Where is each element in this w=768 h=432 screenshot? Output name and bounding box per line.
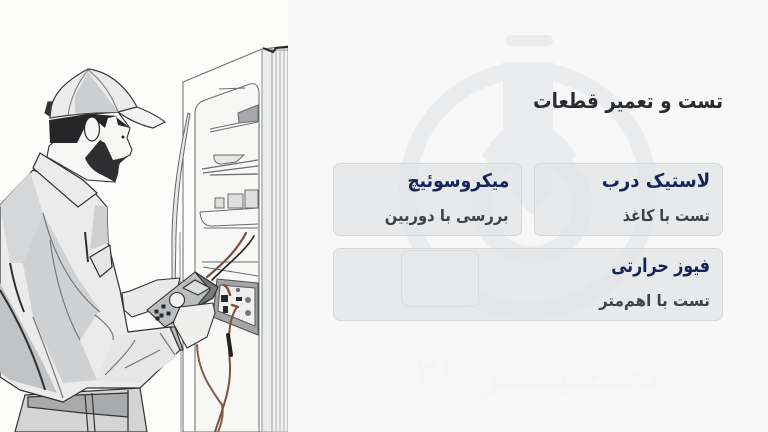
card heading: فیوز حرارتی [611,255,710,277]
card text: تست با کاغذ [623,206,710,225]
control panel [213,279,258,335]
title: تست و تعمیر قطعات [533,89,723,113]
illustration: technician testing refrigerator with multimeter [0,46,288,432]
shelves [210,88,258,132]
card text: بررسی با دوربین [385,206,509,225]
card heading: لاستیک درب [602,170,710,192]
shelf items [238,105,258,123]
watermark text: تعـمـیــــر ۲۴ [414,345,660,400]
cap [45,69,165,128]
refrigerator [172,46,288,432]
watermark: logo and brand [402,35,660,400]
card heading: میکروسوئیچ [407,170,509,192]
card: microswitch [333,163,522,236]
card text: تست با اهم‌متر [599,291,710,310]
pants [15,388,147,432]
card: thermal fuse [333,248,723,321]
shirt and sleeve [0,170,183,402]
faint inset square [401,250,479,307]
neck and face [47,112,132,182]
multimeter and gloves [122,272,218,348]
card: door gasket [534,163,723,236]
collar [33,153,97,207]
beard [85,140,127,182]
hair [49,114,118,143]
test wires [197,233,254,432]
ear [84,117,100,141]
